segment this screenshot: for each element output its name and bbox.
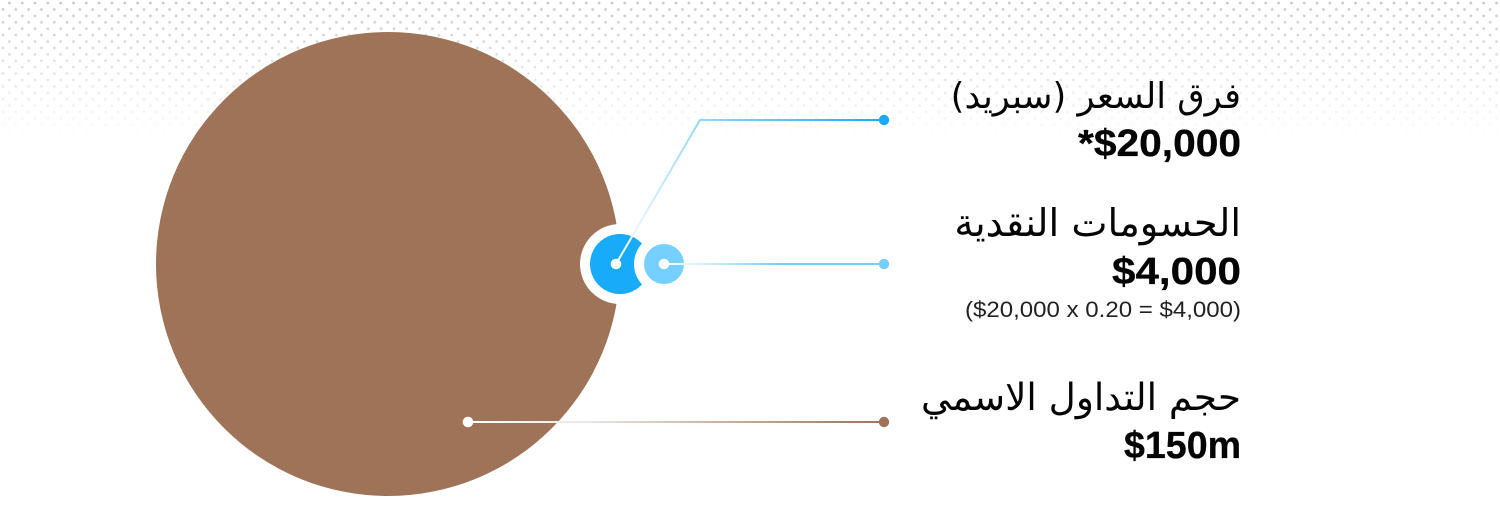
dot pattern background [2, 2, 1498, 120]
label: nominal trading volume: $150m [1124, 425, 1241, 467]
label: nominal trading volume [921, 375, 1241, 467]
label: price difference: *$20,000 [1078, 123, 1241, 165]
label: price difference: فرق السعر (سبريد) [951, 76, 1241, 117]
circle: cash discounts [634, 234, 694, 294]
label: price difference [951, 76, 1241, 165]
circle: price difference (spread) [580, 224, 660, 304]
connector: price difference [611, 115, 889, 269]
connector: cash discounts [659, 259, 889, 269]
connector: nominal trading volume [463, 417, 889, 427]
label: cash discounts: ($20,000 x 0.20 = $4,000) [965, 297, 1241, 322]
label: nominal trading volume: حجم التداول الاسمي [921, 375, 1241, 420]
label: cash discounts: الحسومات النقدية [954, 201, 1241, 246]
label: cash discounts: $4,000 [1112, 251, 1241, 293]
label: cash discounts [954, 201, 1241, 322]
circle: nominal trading volume [156, 32, 620, 496]
